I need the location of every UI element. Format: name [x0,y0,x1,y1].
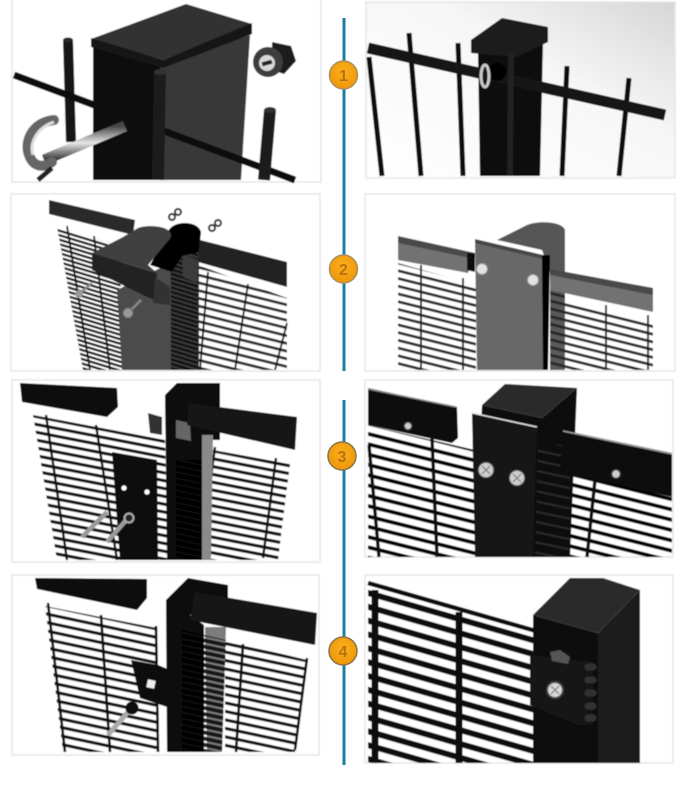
icon: rail [368,48,665,115]
panel: step 4 assembled view [365,575,673,763]
icon: post [533,578,640,763]
panel: step 3 exploded view [12,380,320,562]
icon: rail rod [14,75,295,180]
icon: post [166,578,228,752]
panel: step 4 exploded view [12,575,319,755]
icon: post top [497,222,565,272]
icon: right mesh [198,265,287,370]
icon: front fence wires [154,69,276,180]
icon: post side mesh [170,232,199,370]
badge: step 4: 4 [339,644,348,661]
badge: step 3: 3 [338,449,347,466]
icon: fence wires [369,33,629,176]
icon: right rail [550,269,653,312]
badge: step 2: 2 [339,262,348,279]
icon: top rails [35,578,317,645]
icon: post cap [471,18,548,57]
icon: top rails [49,200,287,287]
icon: screws [476,264,538,286]
icon: nut and washer [253,42,296,77]
icon: eye bolt [481,53,511,176]
icon: right mesh [225,640,307,752]
icon: right mesh [565,472,672,557]
icon: clamp [530,650,593,725]
icon: post [478,43,543,176]
icon: hook bolt [28,120,125,180]
icon: bolt [108,702,138,735]
icon: post face [117,262,172,370]
icon: left mesh [57,226,122,370]
icon: left mesh [33,415,168,560]
icon: mesh [368,583,543,763]
icon: left mesh [398,263,476,370]
icon: bolts [82,512,134,542]
icon: post [165,383,220,560]
icon: right mesh [550,290,653,370]
icon: bracket [92,226,171,305]
badge: step 1: 1 [339,68,348,85]
badge: step 3 [328,442,356,470]
timeline upper line [342,18,346,371]
icon: washers [169,209,221,231]
icon: post [475,384,577,557]
panel: step 1 assembled view [366,2,675,178]
icon: right mesh [200,447,290,560]
badge: step 4 [329,637,357,665]
icon: post plate [472,413,537,557]
badge: step 2 [330,255,358,283]
icon: left mesh [45,603,159,752]
icon: small clip [148,413,162,435]
icon: clamp [131,660,170,708]
icon: right rail [560,430,672,497]
panel: step 3 assembled view [365,380,673,557]
icon: post plate [475,239,550,370]
panel: step 2 exploded view [11,194,320,371]
icon: left rail [398,236,475,273]
icon: post top [150,223,201,272]
timeline lower line [342,400,346,765]
panel: step 2 assembled view [365,194,675,371]
icon: top rails [20,383,297,450]
panel: step 1 exploded view [12,0,321,182]
icon: left mesh [368,425,475,557]
icon: screw [547,682,563,698]
icon: plate with holes [112,452,158,560]
icon: screws [478,462,524,486]
icon: rear fence wire [63,38,73,142]
icon: left rail [368,388,458,443]
badge: step 1 [330,61,358,89]
icon: bolts [75,283,141,318]
icon: post with cap [91,4,252,180]
